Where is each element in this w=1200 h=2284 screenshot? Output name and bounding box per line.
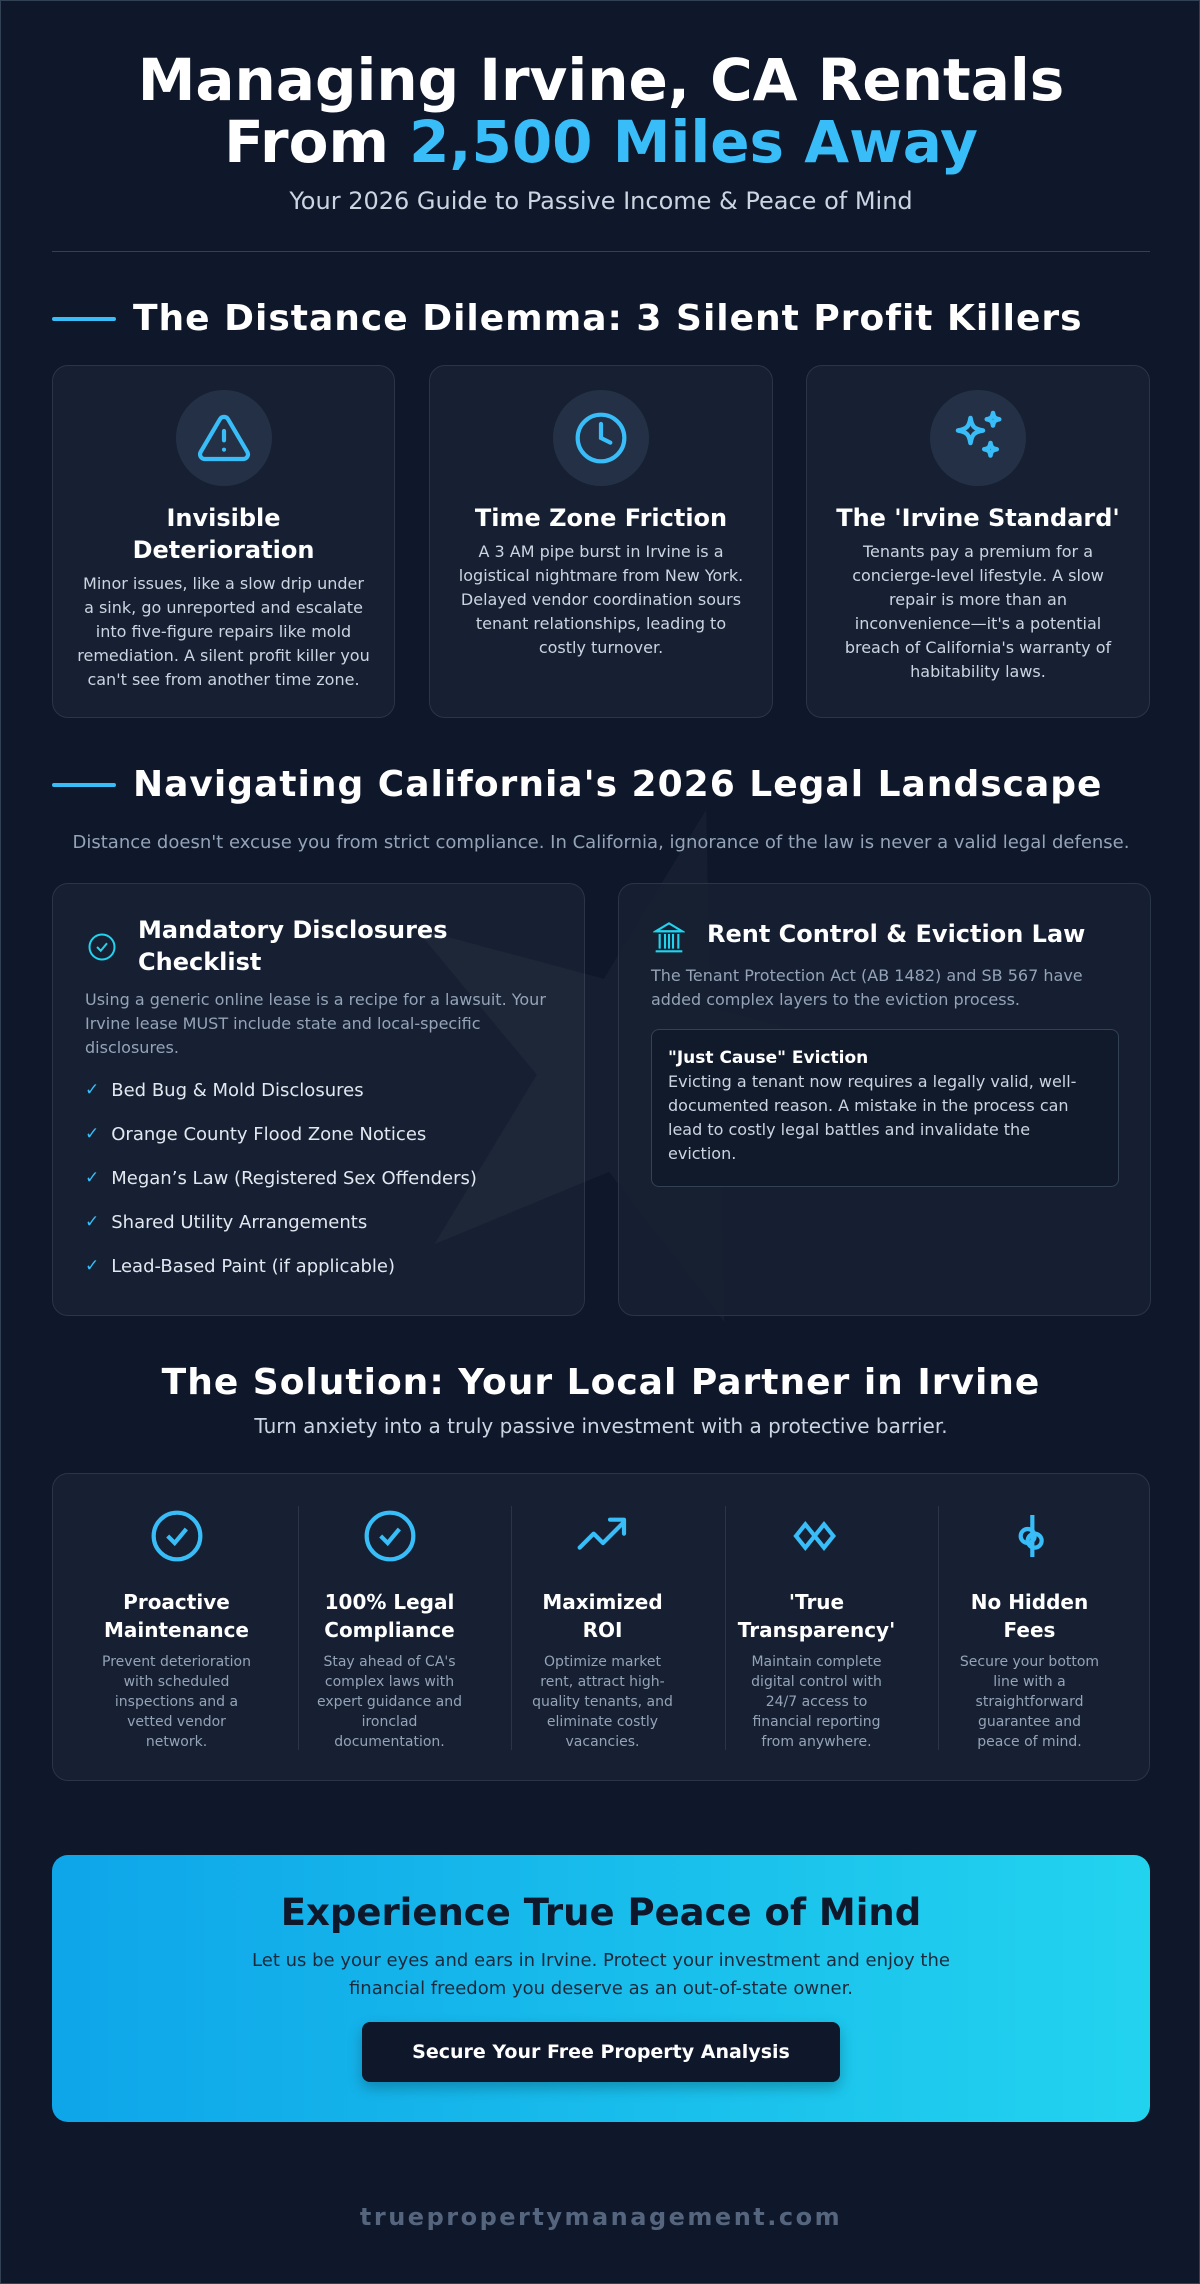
title	[138, 46, 1064, 176]
benefit: maximized roi: ROI	[583, 1618, 622, 1642]
heading: distance dilemma: The Distance Dilemma: 3 Silent Profit Killers	[133, 298, 1083, 339]
icon: sparkles	[930, 390, 1026, 486]
cta heading: Experience True Peace of Mind	[281, 1891, 921, 1934]
benefit: no hidden fees: No Hidden	[971, 1590, 1088, 1614]
callout: just cause	[651, 1029, 1119, 1187]
benefit: transparency: Maintain complete digital control with 24/7 access to financial reporting from anywhere.	[751, 1654, 882, 1750]
cta button	[362, 2022, 840, 2082]
checklist: ✓	[85, 1212, 99, 1232]
card text: A 3 AM pipe burst in Irvine is a logistical nightmare from New York. Delayed vendor coordination sours tenant relationships, leading to costly turnover.	[459, 542, 743, 657]
checklist: Shared Utility Arrangements	[111, 1212, 367, 1232]
checklist	[85, 1080, 477, 1276]
benefit: proactive maintenance	[102, 1510, 251, 1750]
benefit: legal compliance: 100% Legal	[325, 1590, 454, 1614]
benefit: maximized roi	[532, 1518, 673, 1750]
card: invisible deterioration	[52, 365, 395, 718]
benefit: maximized roi: Maximized	[542, 1590, 663, 1614]
benefit: legal compliance: Compliance	[324, 1618, 455, 1642]
panel: rent control	[618, 883, 1151, 1316]
checklist: Orange County Flood Zone Notices	[111, 1124, 426, 1144]
panel text: Using a generic online lease is a recipe for a lawsuit. Your Irvine lease MUST include state and local-specific disclosures.	[85, 990, 546, 1057]
checklist: Lead-Based Paint (if applicable)	[111, 1256, 395, 1276]
panel heading: Checklist	[138, 948, 261, 976]
icon: warning	[176, 390, 272, 486]
card title: The 'Irvine Standard'	[836, 504, 1120, 532]
benefit: no hidden fees: Fees	[1004, 1618, 1055, 1642]
icon: courthouse	[653, 922, 685, 952]
subtitle: Your 2026 Guide to Passive Income & Peace of Mind	[289, 187, 913, 215]
card title: Time Zone Friction	[475, 504, 727, 532]
checklist: ✓	[85, 1168, 99, 1188]
cta banner	[52, 1855, 1150, 2122]
icon: clock	[553, 390, 649, 486]
benefit: no hidden fees: Secure your bottom line with a straightforward guarantee and peace of mind.	[960, 1654, 1099, 1750]
cta button: Secure Your Free Property Analysis	[412, 2041, 790, 2063]
benefit: proactive maintenance: Prevent deterioration with scheduled inspections and a vetted vendor network.	[102, 1654, 251, 1750]
benefit: transparency: Transparency'	[738, 1618, 895, 1642]
watermark star	[305, 737, 977, 1369]
footer: truepropertymanagement.com	[360, 2203, 842, 2231]
benefit: transparency: 'True	[789, 1590, 844, 1614]
panel heading: Mandatory Disclosures	[138, 916, 447, 944]
panel: solution benefits	[52, 1473, 1150, 1781]
checklist: ✓	[85, 1256, 99, 1276]
title: From 2,500 Miles Away	[224, 108, 978, 176]
heading: legal landscape: Navigating California's 2026 Legal Landscape	[133, 764, 1102, 805]
card title	[133, 504, 314, 564]
checklist: ✓	[85, 1080, 99, 1100]
card title: Deterioration	[133, 536, 314, 564]
section subtitle: Distance doesn't excuse you from strict compliance. In California, ignorance of the law is never a valid legal defense.	[72, 832, 1129, 853]
icon: check circle	[88, 934, 116, 960]
card title: Invisible	[166, 504, 281, 532]
card: irvine standard	[806, 365, 1150, 718]
card text: Tenants pay a premium for a concierge-level lifestyle. A slow repair is more than an inconvenience—it's a potential breach of California's warranty of habitability laws.	[845, 542, 1111, 681]
callout: just cause: "Just Cause" Eviction	[668, 1048, 868, 1068]
card: time zone friction	[429, 365, 773, 718]
panel heading: Rent Control & Eviction Law	[707, 920, 1085, 948]
benefit: proactive maintenance: Proactive	[123, 1590, 230, 1614]
benefit: no hidden fees	[960, 1515, 1099, 1750]
benefit: legal compliance: Stay ahead of CA's complex laws with expert guidance and ironclad documentation.	[317, 1654, 462, 1750]
checklist: Megan’s Law (Registered Sex Offenders)	[111, 1168, 477, 1188]
panel text: The Tenant Protection Act (AB 1482) and SB 567 have added complex layers to the eviction process.	[651, 966, 1083, 1009]
heading: solution: The Solution: Your Local Partner in Irvine	[162, 1362, 1040, 1403]
benefit: proactive maintenance: Maintenance	[104, 1618, 249, 1642]
checklist: ✓	[85, 1124, 99, 1144]
benefit: maximized roi: Optimize market rent, attract high-quality tenants, and eliminate costly vacancies.	[532, 1654, 673, 1750]
checklist: Bed Bug & Mold Disclosures	[111, 1080, 364, 1100]
callout: just cause: Evicting a tenant now requires a legally valid, well-documented reason. A mistake in the process can lead to costly legal battles and invalidate the eviction.	[668, 1072, 1076, 1163]
panel heading	[138, 916, 447, 976]
solution subtitle: Turn anxiety into a truly passive investment with a protective barrier.	[254, 1414, 948, 1438]
benefit: legal compliance	[317, 1510, 462, 1750]
cta text: Let us be your eyes and ears in Irvine. Protect your investment and enjoy the financial freedom you deserve as an out-of-state owner.	[252, 1950, 950, 1999]
card text: Minor issues, like a slow drip under a sink, go unreported and escalate into five-figure repairs like mold remediation. A silent profit killer you can't see from another time zone.	[77, 574, 370, 689]
title: Managing Irvine, CA Rentals	[138, 46, 1064, 114]
panel: disclosures checklist	[52, 883, 585, 1316]
benefit: transparency	[738, 1521, 895, 1750]
